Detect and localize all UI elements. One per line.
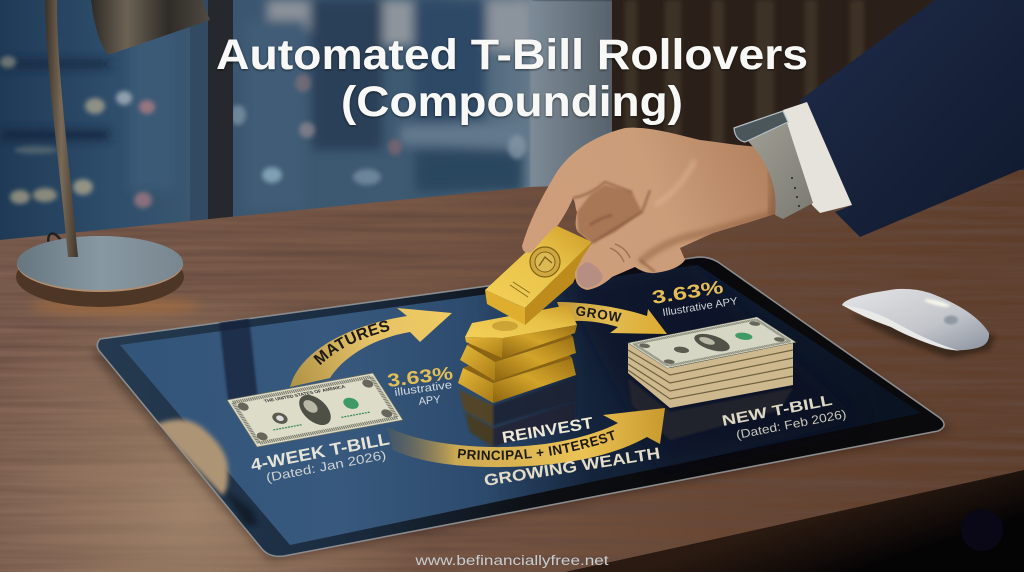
desk front edge (565, 470, 1024, 572)
arrow: grow (557, 302, 667, 334)
tablet body with silver rim (97, 257, 944, 556)
reflection: cash stack (628, 378, 793, 440)
title: Automated T-Bill Rollovers (216, 31, 808, 79)
window frame (208, 0, 233, 225)
arrow: matures (290, 308, 452, 387)
label: growing wealth: GROWING WEALTH (483, 445, 661, 490)
label: 4-week t-bill: (Dated: Jan 2026) (265, 448, 387, 485)
rate callout: 3.63% left: 3.63% (386, 362, 454, 391)
label: 4-week t-bill (249, 429, 391, 485)
rate callout: 3.63% left: APY (418, 394, 442, 408)
title (216, 31, 808, 126)
rate callout: 3.63% right: 3.63% (650, 276, 725, 308)
reflection: gold stack (459, 378, 576, 447)
dark curtain (612, 0, 972, 180)
label: matures: MATURES (313, 320, 390, 365)
single dollar bill (227, 373, 403, 447)
arrow: reinvest (387, 408, 665, 468)
watermark dot (961, 509, 1003, 551)
desk lamp (16, 0, 210, 307)
bottom bar (458, 350, 576, 403)
computer mouse (842, 289, 995, 358)
rate callout: 3.63% right: Illustrative APY (662, 295, 739, 319)
label: principal + interest: PRINCIPAL + INTEREST (458, 430, 614, 460)
rate callout: 3.63% right (650, 276, 739, 319)
sheer curtain (530, 0, 614, 192)
label: new t-bill: NEW T-BILL (721, 392, 834, 430)
rate callout: 3.63% left (386, 362, 454, 408)
lower palm shadow (640, 212, 780, 262)
top banknote (628, 317, 796, 368)
title: (Compounding) (341, 78, 683, 126)
label: reinvest: REINVEST (501, 415, 595, 447)
tablet screen (120, 265, 921, 545)
wrist shadow (768, 170, 776, 216)
rate callout: 3.63% left: illustrative (394, 379, 453, 399)
thumb nail (577, 262, 603, 288)
thumb knuckle creases (610, 244, 630, 262)
wooden desk (0, 170, 1024, 572)
middle bar (460, 328, 576, 381)
shirt cuff (783, 102, 852, 213)
label: 4-week t-bill: 4-WEEK T-BILL (249, 429, 391, 475)
background window view (0, 0, 1024, 260)
hand (522, 128, 780, 290)
label: new t-bill (721, 392, 848, 442)
label: grow: GROW (575, 303, 623, 325)
finger creases (573, 182, 655, 272)
knuckle highlight (655, 160, 695, 205)
lamp pole (45, 0, 78, 257)
lamp base (16, 236, 184, 307)
website footer: www.befinanciallyfree.net (414, 553, 609, 568)
gold bar stack (458, 305, 577, 403)
jacket sleeve (800, 0, 1024, 237)
held gold bar (485, 225, 592, 325)
label: new t-bill: (Dated: Feb 2026) (735, 407, 848, 442)
lamp shade (91, 0, 210, 55)
lamp power cord (48, 233, 62, 244)
smartwatch (734, 111, 813, 219)
cash stack (628, 317, 796, 408)
single dollar bill: THE UNITED STATES OF AMERICA (263, 384, 347, 404)
screen reflections (155, 262, 860, 525)
tablet (92, 257, 950, 560)
curled fingers shadow (577, 185, 642, 243)
top stacked bar (465, 305, 577, 358)
